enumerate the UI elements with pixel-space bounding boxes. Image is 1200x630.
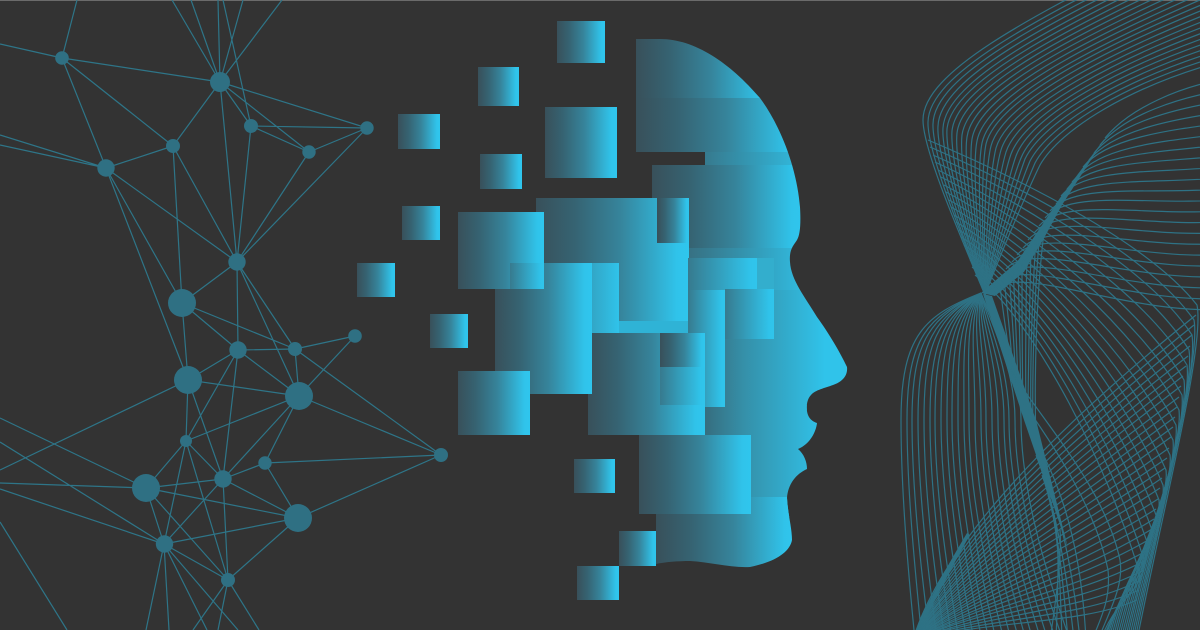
wave lines: top arcs into pinch bbox=[923, 0, 1200, 295]
top edge line bbox=[0, 0, 1200, 1]
face blocks bbox=[458, 198, 774, 514]
wave lines: left bulge running to the bottom bbox=[901, 293, 1070, 630]
face silhouette layers bbox=[636, 39, 852, 572]
network: nodes bbox=[55, 51, 448, 587]
wave lines: cone lines bending down the right side bbox=[928, 140, 1198, 630]
network: connecting lines bbox=[0, 0, 441, 630]
wave lines: rising fan from lower left bbox=[913, 315, 1196, 630]
wave lines: near-vertical mesh behind band bbox=[1000, 225, 1045, 440]
scattered pixel squares bbox=[357, 21, 656, 600]
wave lines: dense envelope bands bbox=[913, 138, 1105, 630]
wave lines: arcs leaving envelope to the right edge bbox=[990, 78, 1200, 310]
